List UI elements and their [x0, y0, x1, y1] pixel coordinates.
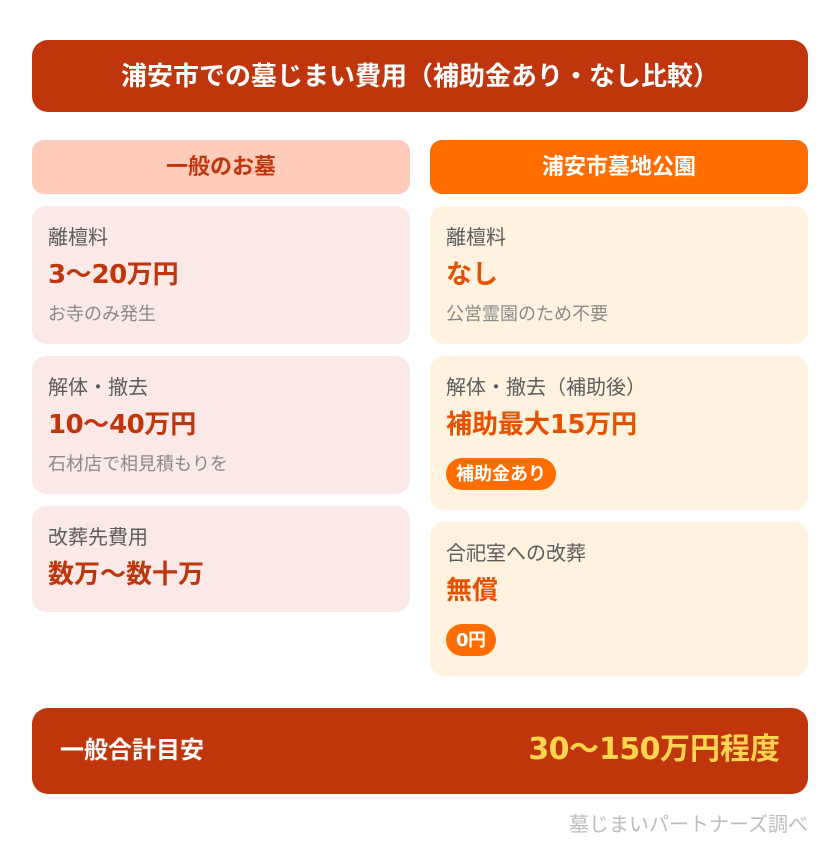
label: 改葬先費用: [48, 525, 148, 549]
value: 無償: [446, 576, 498, 606]
value: 補助最大15万円: [446, 410, 637, 440]
note: お寺のみ発生: [48, 304, 156, 325]
total label: 一般合計目安: [60, 736, 204, 764]
panel: general demolition: [32, 356, 410, 494]
panel: general temple leaving fee: [32, 206, 410, 344]
column heading: general grave: [32, 140, 410, 194]
label: 解体・撤去（補助後）: [446, 375, 646, 399]
badge: subsidy available: [446, 458, 556, 490]
value: 数万〜数十万: [48, 560, 204, 590]
value: 3〜20万円: [48, 260, 179, 290]
panel: park demolition: [430, 356, 808, 510]
label: 合祀室への改葬: [446, 541, 586, 565]
note: 石材店で相見積もりを: [48, 454, 228, 475]
badge: zero yen: 0円: [456, 630, 486, 651]
badge: zero yen: [446, 624, 496, 656]
total value: 30〜150万円程度: [528, 732, 780, 767]
value: 10〜40万円: [48, 410, 196, 440]
value: なし: [446, 260, 498, 290]
source note: 墓じまいパートナーズ調べ: [569, 812, 808, 836]
label: 解体・撤去: [48, 375, 148, 399]
title: 浦安市での墓じまい費用（補助金あり・なし比較）: [121, 62, 719, 92]
panel: park temple leaving fee: [430, 206, 808, 344]
column heading: Urayasu cemetery park: 浦安市墓地公園: [542, 155, 696, 180]
title: [32, 40, 808, 112]
total bar: [32, 708, 808, 794]
column heading: Urayasu cemetery park: [430, 140, 808, 194]
note: 公営霊園のため不要: [446, 304, 608, 325]
panel: general reburial cost: [32, 506, 410, 612]
label: 離檀料: [446, 225, 506, 249]
panel: park communal vault: [430, 522, 808, 676]
label: 離檀料: [48, 225, 108, 249]
badge: subsidy available: 補助金あり: [456, 464, 546, 485]
column heading: general grave: 一般のお墓: [166, 155, 276, 180]
